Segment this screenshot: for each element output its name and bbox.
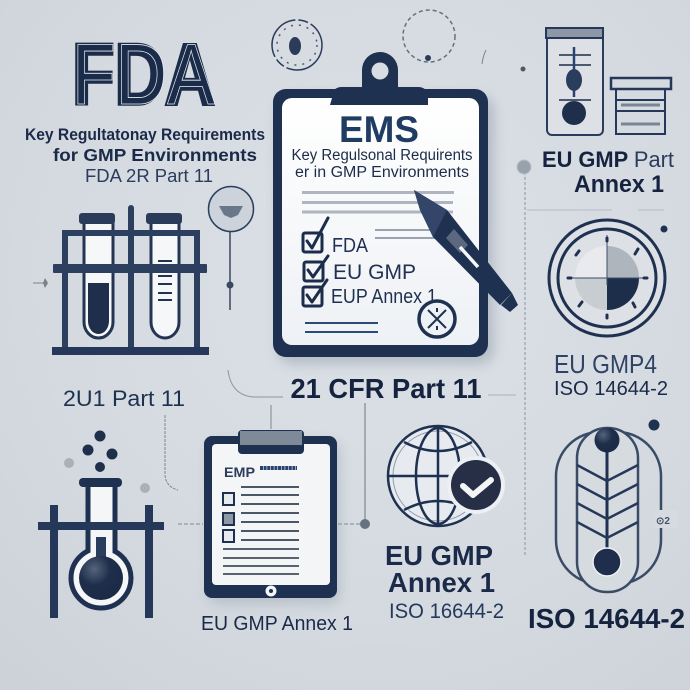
label: EU GMP Annex 1 ISO 16644-2: ISO 16644-2: [389, 600, 504, 623]
text rules: [302, 192, 454, 238]
checklist: EU GMP: [333, 261, 416, 284]
checklist: FDA: [332, 235, 369, 257]
checklist: EUP Annex 1: [331, 286, 437, 308]
icon: gauge on stem: [208, 186, 254, 310]
connector lines: [165, 66, 664, 557]
FDA logo: FDA: [72, 27, 216, 123]
label: 21 CFR Part 11: 21 CFR Part 11: [290, 373, 482, 404]
tube left: [79, 213, 115, 338]
icon: pen: [414, 190, 518, 312]
label: EU GMP ISO 14644-2: ISO 14644-2: [554, 377, 668, 400]
heading: key regulatory requirements: Key Regultatonay Requirements: [25, 126, 265, 144]
FDA logo: FDA: [72, 27, 215, 123]
icon: dial clock: [549, 220, 668, 336]
clip: [330, 52, 428, 105]
checklist: [303, 218, 437, 308]
tube right: [146, 213, 182, 338]
heading: key regulatory requirements: for GMP Environments: [53, 145, 257, 165]
icon: thermometer jar: [546, 28, 603, 135]
label: EU GMP Annex 1 ISO 16644-2: [385, 540, 504, 623]
heading: key regulatory requirements: [25, 126, 265, 186]
panel: checklist tablet: [204, 430, 340, 604]
icon: pipeline capsule: ⊙2: [656, 516, 670, 527]
board: [273, 89, 488, 357]
icon: storage box: [611, 78, 671, 134]
label: EU GMP Part Annex 1: EU GMP Part: [542, 147, 674, 172]
label: EU GMP Annex 1 ISO 16644-2: EU GMP: [385, 540, 493, 571]
heading: key regulatory requirements: FDA 2R Part 11: [85, 165, 213, 186]
label: 2U1 Part 11: 2U1 Part 11: [63, 386, 185, 411]
label: EU GMP Part Annex 1: [542, 147, 674, 198]
label: EU GMP ISO 14644-2: [554, 349, 668, 400]
clipboard subtitle: [292, 147, 473, 181]
icon: pipeline capsule: [556, 420, 678, 592]
rows: [223, 487, 299, 574]
label: EU GMP Annex 1 ISO 16644-2: Annex 1: [388, 567, 495, 598]
icon: flask on stand: [38, 430, 164, 618]
small dials top: [272, 10, 486, 70]
EMS title: EMS: [339, 109, 419, 150]
label: EU GMP ISO 14644-2: EU GMP4: [554, 349, 657, 379]
icon: test tube rack: [33, 208, 209, 355]
panel: EMS clipboard: [273, 52, 518, 364]
clipboard subtitle: er in GMP Environments: [295, 164, 469, 181]
icon: seal: [419, 301, 455, 337]
label: ISO 14644-2: ISO 14644-2: [528, 603, 685, 634]
paper: [282, 98, 479, 345]
clip: [238, 430, 304, 454]
label: EU GMP Annex 1 (tablet): EU GMP Annex 1: [201, 613, 353, 635]
icon: globe with check badge: [388, 426, 505, 526]
label: EU GMP Part Annex 1: Annex 1: [574, 171, 664, 198]
clipboard subtitle: Key Regulsonal Requirents: [292, 147, 473, 164]
doc header: EMP: [224, 464, 255, 480]
